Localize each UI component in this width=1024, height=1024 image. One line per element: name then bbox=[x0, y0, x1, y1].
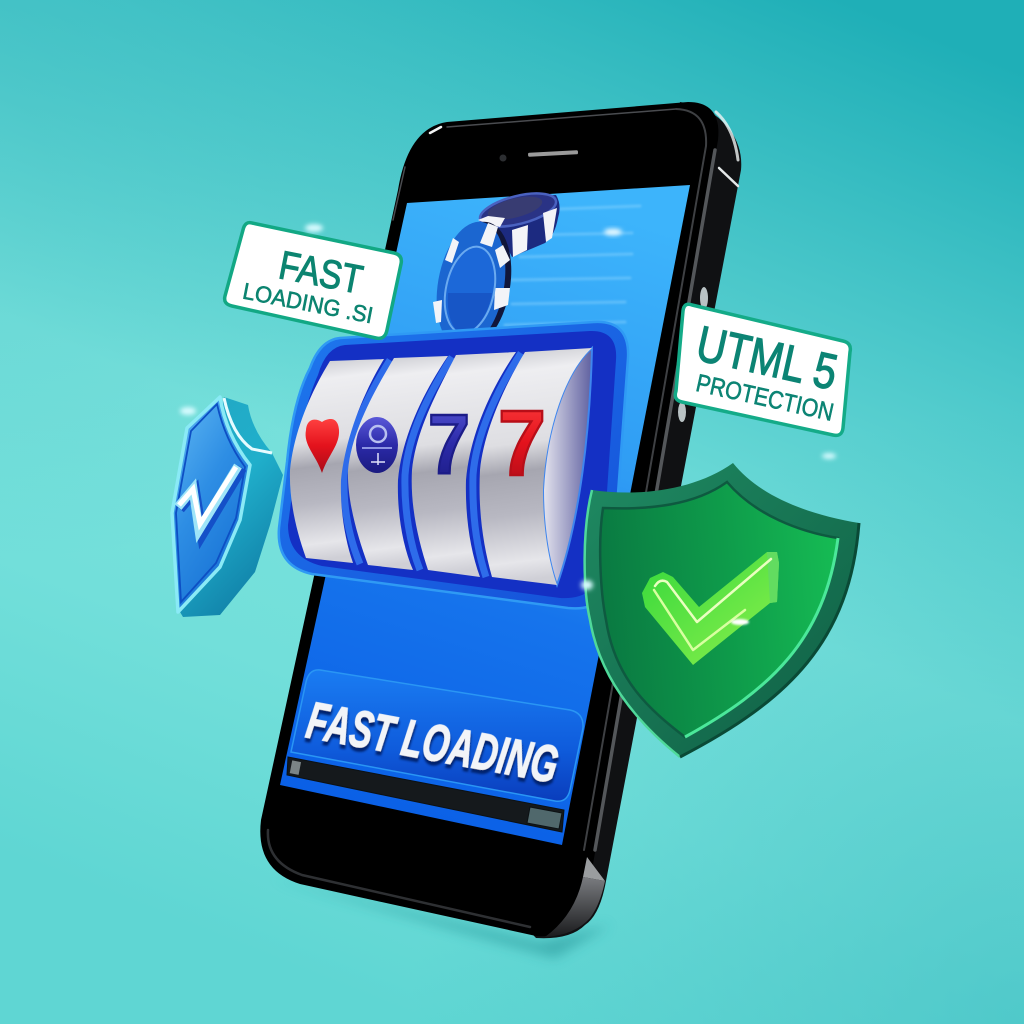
reel 2 bbox=[348, 356, 448, 570]
progress bar bbox=[287, 757, 564, 832]
label subtext: LOADING .SI bbox=[241, 278, 375, 328]
sparkles bbox=[180, 224, 836, 590]
side buttons bbox=[678, 287, 708, 422]
upper chip bbox=[477, 187, 560, 257]
reel 3 bbox=[412, 352, 516, 577]
fast loading button bbox=[291, 670, 583, 801]
check mark bbox=[642, 552, 779, 665]
label heading: FAST bbox=[275, 243, 366, 303]
poker chips bbox=[427, 187, 560, 354]
machine inner panel bbox=[288, 331, 616, 598]
green shield bbox=[585, 463, 859, 757]
phone screen bbox=[280, 185, 690, 845]
machine frame bbox=[279, 322, 628, 608]
shield rim bbox=[585, 463, 859, 757]
reel 4 bbox=[480, 348, 592, 585]
label: fast loading bbox=[225, 223, 401, 338]
screen light streaks bbox=[505, 206, 640, 325]
phone edge highlights bbox=[268, 109, 738, 927]
phone front face bbox=[260, 102, 718, 936]
shield face bbox=[600, 482, 838, 737]
label: html protection bbox=[675, 304, 850, 435]
phone bbox=[260, 102, 741, 938]
shield check zigzag bbox=[178, 466, 242, 535]
reel gaps bbox=[344, 353, 521, 577]
label subtext: PROTECTION bbox=[693, 369, 836, 427]
slot machine bbox=[279, 322, 628, 608]
label heading: UTML 5 bbox=[692, 315, 842, 401]
shield side bbox=[177, 397, 283, 617]
earpiece and camera bbox=[500, 150, 578, 162]
phone side edge bbox=[500, 102, 741, 938]
fast loading text: FAST LOADING bbox=[302, 691, 563, 795]
corner bevel bbox=[583, 857, 605, 881]
phone shadow bbox=[270, 878, 610, 958]
blue seven: 7 bbox=[428, 397, 470, 491]
red seven: 7 bbox=[498, 391, 546, 495]
reel 1 bbox=[290, 359, 384, 563]
shield face bbox=[172, 397, 250, 612]
heart symbol bbox=[306, 419, 339, 473]
lower chip bbox=[427, 216, 521, 354]
blue shield bbox=[172, 397, 283, 617]
reel 4 side bbox=[543, 348, 592, 585]
reels bbox=[290, 348, 592, 585]
blue chip symbol bbox=[356, 417, 398, 473]
